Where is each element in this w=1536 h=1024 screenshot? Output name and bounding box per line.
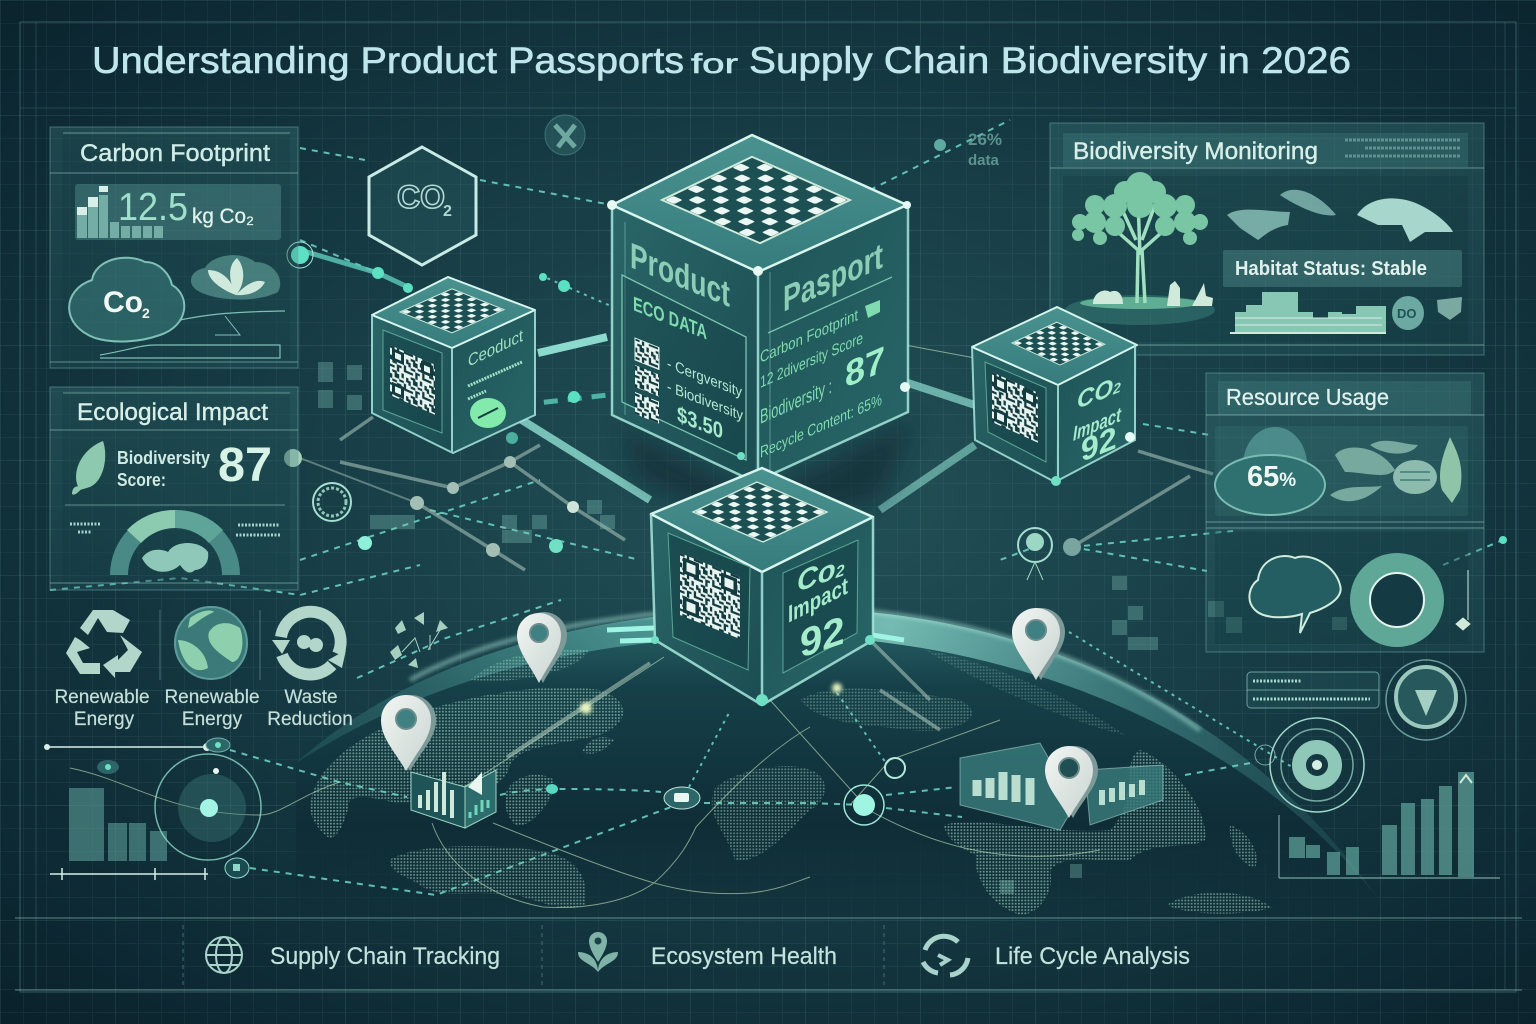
- continent: south: [389, 846, 586, 908]
- continent: central america: [505, 737, 614, 826]
- right inner data: Carbon Footprint: [760, 305, 858, 367]
- left inner card: eco data: ECO DATA: [633, 293, 707, 344]
- icon: globe: [175, 607, 247, 679]
- text: supply chain tracking: Supply Chain Tracking: [270, 943, 500, 970]
- gauge chart: [70, 510, 280, 575]
- panel: ecological impact: [50, 387, 298, 590]
- globe with continents: [296, 608, 1377, 917]
- continent: center right: [712, 766, 825, 860]
- labels: icon row: [54, 687, 353, 730]
- decorative data tiles: [318, 362, 1347, 894]
- labels: icon row: Waste: [284, 687, 338, 708]
- label: left cube: Ceoduct: [468, 325, 523, 371]
- right inner data: 12 2diversity Score: [760, 328, 863, 392]
- radar node: lower left: [97, 738, 261, 878]
- readout: 12.5 kg CO2: [75, 184, 281, 240]
- icon: CO2 hexagon: CO: [397, 179, 445, 215]
- qr code: left cube: [390, 345, 435, 415]
- cube: front bottom: [651, 468, 875, 706]
- readout: 12.5 kg CO2: kg Co₂: [192, 205, 254, 228]
- right inner data: Biodiversity :: [760, 375, 832, 429]
- title: [92, 40, 1351, 81]
- continent: eurasia: [944, 750, 1205, 915]
- icon: CO2 cloud: 2: [142, 305, 150, 321]
- mini chart on globe: left: [411, 770, 496, 828]
- labels: icon row: Renewable: [164, 687, 260, 708]
- label: CO2 impact 92 front: [788, 550, 848, 667]
- icon: leaf cloud: [191, 255, 280, 300]
- icon: recycle: [66, 610, 142, 678]
- label: Product: Product: [630, 234, 730, 315]
- qr top: front cube: [693, 482, 827, 542]
- small icon: stats label: [968, 130, 1002, 169]
- maps: [1227, 190, 1453, 242]
- metric: biodiversity score: Biodiversity: [117, 448, 210, 468]
- bottom bar: [15, 918, 1522, 990]
- small icon: stats label: 26%: [968, 130, 1002, 149]
- heading: ecological impact: Ecological Impact: [77, 399, 268, 426]
- title: Supply Chain Biodiversity in 2026: [749, 40, 1351, 81]
- icon: species badge: DO: [1397, 306, 1416, 321]
- labels: icon row: Reduction: [267, 709, 353, 730]
- icon: CO2 cloud: [69, 258, 184, 342]
- speech bubble cloud: [1249, 556, 1341, 633]
- heading: biodiversity monitoring: Biodiversity Monitoring: [1073, 138, 1318, 165]
- continent: upper arc: [471, 649, 589, 681]
- heading: resource usage: Resource Usage: [1226, 384, 1389, 410]
- label: habitat status: Habitat Status: Stable: [1235, 258, 1427, 280]
- labels: icon row: Energy: [74, 709, 135, 730]
- labels: icon row: Energy: [182, 709, 243, 730]
- title: Understanding Product Passports: [92, 40, 684, 81]
- right inner data: Recycle Content: 65%: [760, 390, 882, 462]
- icon: ecosystem: [578, 932, 618, 972]
- panel: biodiversity monitoring: [1050, 123, 1484, 355]
- label: habitat status: [1223, 250, 1462, 287]
- continent: north america: [310, 688, 623, 838]
- label: Pasport: Pasport: [783, 235, 883, 321]
- right inner data: [760, 277, 892, 462]
- ring chart: [1360, 563, 1434, 637]
- cube: right: [972, 307, 1137, 486]
- icon: arrow badge: [1386, 660, 1466, 740]
- qr code: front cube: [680, 553, 740, 639]
- label: CO2 impact 92 front: 92: [800, 607, 844, 667]
- cube: left: [372, 277, 535, 453]
- text: ecosystem health: Ecosystem Health: [651, 943, 837, 970]
- map pin: north east: [1012, 608, 1065, 680]
- icon: CO2 hexagon: 2: [443, 203, 452, 220]
- label: CO2 impact 92: CO2: [1077, 370, 1121, 415]
- left inner card: eco data: - Biodiversity: [667, 378, 743, 425]
- map pin: west: [381, 695, 436, 771]
- icon: CO2 hexagon: [369, 147, 476, 265]
- qr top: main cube: [662, 157, 850, 243]
- small icon: stats label: data: [968, 152, 1000, 169]
- map pin: east: [1045, 746, 1098, 818]
- label: CO2 impact 92 front: Impact: [788, 572, 848, 629]
- icon: CO2 cloud: Co: [103, 286, 143, 319]
- heading: carbon footprint: Carbon Footprint: [80, 140, 270, 167]
- map pin: north: [517, 612, 567, 683]
- label: CO2 impact 92: [1073, 370, 1122, 470]
- qr top: left cube: [400, 289, 504, 333]
- network nodes: [284, 139, 1507, 825]
- icon: tree: [1065, 172, 1215, 325]
- right inner data: 87: [845, 338, 885, 396]
- bar chart: lower left: [44, 743, 211, 880]
- icon: globe grid: [206, 937, 242, 973]
- icon row: sustainability: [54, 607, 448, 730]
- panel: resource usage: [1206, 373, 1484, 652]
- text: life cycle analysis: Life Cycle Analysis: [995, 943, 1190, 970]
- resource map shapes: [1330, 437, 1461, 503]
- network links: [50, 120, 1503, 908]
- bar chart: habitat: [1230, 292, 1386, 334]
- qr top: right cube: [1012, 322, 1105, 365]
- label: CO2 impact 92 front: Co2: [797, 550, 845, 599]
- left inner card: eco data: $3.50: [677, 401, 723, 444]
- metric: biodiversity score: Score:: [117, 470, 166, 490]
- cube: main product passport: [607, 135, 915, 530]
- qr code: right cube: [992, 372, 1038, 443]
- continent: australia: [1167, 893, 1272, 914]
- panel: carbon footprint: [50, 127, 298, 368]
- labels: icon row: Renewable: [54, 687, 150, 708]
- metric: biodiversity score: 87: [218, 439, 272, 492]
- left inner card: eco data: - Cergversity: [667, 355, 742, 401]
- gauge: 65 percent: [1215, 427, 1325, 515]
- info card: lower right: [1247, 672, 1379, 708]
- icon: target: [1255, 718, 1364, 812]
- left inner card: eco data: [622, 275, 746, 460]
- mini chart on globe: right: [960, 743, 1163, 830]
- icon: top circle glyph: [545, 115, 585, 155]
- icon: leaf: [72, 441, 105, 495]
- readout: 12.5 kg CO2: 12.5: [118, 186, 188, 229]
- metric: biodiversity score: [117, 439, 272, 492]
- title: for: [691, 48, 738, 79]
- icon: waste cycle: [272, 612, 346, 674]
- label: CO2 impact 92: 92: [1081, 420, 1117, 470]
- icon: leaf fan: [390, 612, 448, 668]
- label: CO2 impact 92: Impact: [1073, 403, 1122, 446]
- icon: life cycle: [923, 936, 968, 975]
- bar chart: lower right: [1279, 772, 1500, 878]
- label: left cube: [468, 325, 523, 428]
- icon: species badge: [1392, 296, 1462, 330]
- gauge: 65 percent: 65%: [1247, 461, 1296, 493]
